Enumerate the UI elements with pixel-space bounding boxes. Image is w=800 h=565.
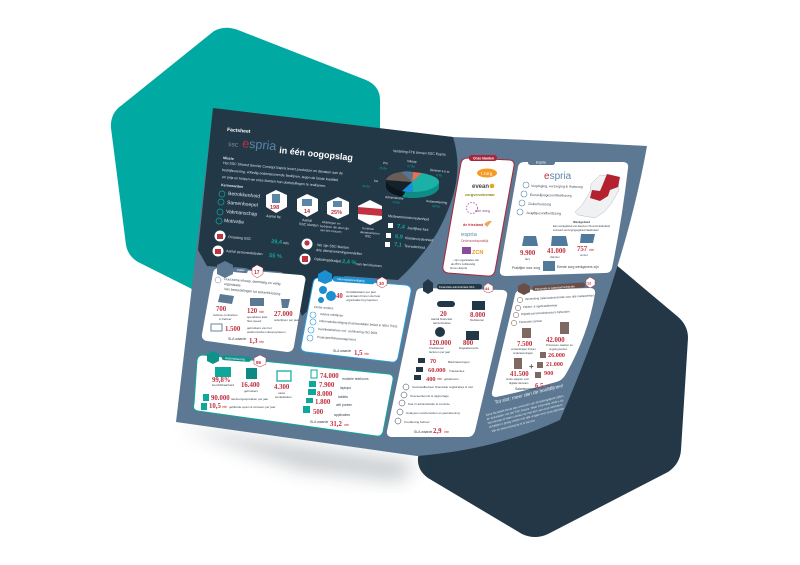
checklist: Overeenkomst & rapportage	[410, 394, 449, 398]
satisfaction scores: 7,1	[394, 242, 402, 249]
footnote: binnen Espria	[450, 266, 468, 270]
checklist: Projectportfoliomanagement	[317, 335, 356, 342]
stat: percentage: bedrijven die deel zijn	[320, 224, 349, 231]
stat: 9.900: 9.900	[520, 250, 536, 257]
stat: aantal fte: 198	[270, 205, 279, 211]
stat: personeel: 55 %	[269, 253, 282, 260]
stat: 41.000	[547, 236, 568, 259]
kernwaarden list: Betrokkenheid	[228, 191, 260, 200]
stat: 7.500: ondersteuningen	[513, 351, 534, 355]
stat: 120 mln	[247, 298, 268, 323]
stat: locaties	[302, 238, 362, 256]
panel: arbo partners: een zorg	[475, 209, 490, 213]
device list: tablets	[338, 395, 348, 399]
closing text: zij helpen u graag verder met alle vragen over onze diensten	[488, 406, 565, 429]
total: 1,5	[354, 350, 363, 357]
stat: 27.000: orderlijnen per jaar	[274, 318, 299, 322]
total: 31,2	[330, 421, 342, 428]
stat: 120 mln: mln	[259, 310, 264, 314]
checklist: Facturatie contact	[519, 319, 542, 324]
badge: 30	[379, 281, 385, 286]
intro text: Duurzame inkoop, doelmatig en veilig	[224, 277, 281, 286]
stat: 42.000: Processen, kaarten en	[546, 343, 573, 347]
badge: 44	[485, 287, 490, 291]
stat: 757 mln: mln	[589, 248, 594, 252]
closing text: en activiteiten van het SSC Espria. Meer informatie vindt u op	[486, 398, 564, 421]
stat: 41.500: Grote stappen voor	[506, 377, 529, 381]
device list: 8.000	[317, 391, 333, 398]
footnote	[450, 258, 479, 270]
icon: plus: +	[529, 362, 534, 371]
logo: zorgpartner: zorgverzekeraar	[465, 192, 495, 197]
dark background hexagon	[418, 253, 688, 537]
figures list: geldstroom	[444, 377, 459, 381]
total: SLA waarde	[228, 337, 246, 341]
kernwaarden list: Kernwaarden	[221, 183, 243, 189]
closing text: het intranet of neem contact op met een van onze adviseurs	[487, 402, 563, 425]
stat: 42.000	[546, 322, 573, 351]
pie labels: Administratie	[385, 195, 404, 201]
stat: 20: administraties	[433, 321, 451, 325]
satisfaction scores: Jaarlijkse fout	[407, 226, 429, 232]
pie chart: Verdeling FTE binnen SSC Espria	[393, 149, 446, 157]
map: netherlands	[575, 174, 620, 218]
badge: Automatisering	[225, 356, 246, 361]
badge: 17	[254, 270, 260, 276]
figures list: 60.000	[428, 367, 446, 374]
logo: e	[242, 136, 250, 151]
total: mln	[364, 352, 369, 356]
stat: locaties: 14	[304, 209, 311, 215]
logo: SSC	[228, 142, 239, 149]
checklist: Kas in administratie & controle	[408, 402, 450, 406]
icon: gears	[318, 286, 336, 303]
stat: 1.500: gebruikers van het	[247, 326, 272, 330]
stat: omzet	[214, 230, 289, 246]
stat: 800: Dagstatements	[459, 346, 479, 350]
closing text: Deze factsheet bevat een overzicht van de belangrijkste cijfers	[485, 394, 564, 417]
checklist: Kwaliteitsbeheer incl. certificering ISO 9001	[318, 327, 378, 335]
satisfaction scores: 6,9	[395, 234, 403, 241]
teal background hexagon	[111, 28, 380, 293]
checklist: Advies richtlijnen	[320, 312, 344, 318]
stat: locaties: SSC klanten	[299, 222, 319, 228]
checklist: Voorraadbeheer financiële registraties & mut	[412, 385, 473, 389]
pie labels: 17 fte	[407, 164, 415, 169]
badge: 86	[256, 360, 262, 365]
pie labels: 8 fte	[436, 173, 443, 178]
panel: arbo partners: t zorg	[481, 171, 493, 176]
checklist: Informatiebeveiliging (huishoudelijke beleid in NEN 7510)	[319, 319, 397, 328]
stat: 16.400	[241, 368, 260, 393]
stat: 4.300: werkplekken	[275, 395, 292, 399]
stat: 8.000: Debiteuren	[470, 318, 485, 322]
stat: percentage: Afdelingen en	[322, 220, 341, 226]
stat: 10,5 mln: mln	[222, 405, 227, 409]
stat: 40: Ontwikkelaars per jaar	[346, 290, 376, 294]
device list: 500	[313, 409, 324, 416]
stat: 7.500: 7.500	[517, 341, 533, 348]
stat: 4.300	[274, 371, 292, 399]
stat: 99,8%: beschikbaarheid	[212, 383, 234, 387]
stat: 1.500	[211, 324, 286, 334]
figures: 21.000	[546, 361, 563, 368]
checklist: Verpleging, verzorging & thuiszorg	[531, 184, 583, 189]
total	[228, 337, 264, 345]
satisfaction scores: Tevredenheid	[404, 244, 425, 250]
device list: mobiele telefoons	[342, 377, 369, 381]
note: Een werkgebied van Espria in Noord-Nederland	[553, 224, 610, 228]
pie labels: Pm	[383, 161, 388, 165]
badge	[518, 277, 595, 295]
stat hexagons	[266, 190, 382, 239]
badge: Financiële administratie SFA	[439, 285, 475, 289]
checklist: Pakket- & applicatiebeheer	[523, 303, 558, 309]
stat: 800: 800	[463, 340, 474, 347]
logo: een zorg	[466, 202, 478, 214]
checklist: Eerstelijnsgezondheidszorg	[530, 193, 572, 198]
footer line: Praktijke voor zorg	[512, 266, 540, 270]
stat: 27.000: 27.000	[274, 311, 293, 318]
panel: arbo partners: Onze klanten	[473, 156, 494, 160]
total	[310, 420, 349, 428]
stat: 41.000: 41.000	[547, 248, 566, 255]
closing text	[485, 383, 565, 433]
logo	[228, 135, 277, 153]
total: mln	[444, 430, 449, 434]
device list: 74.000	[320, 373, 339, 380]
stat: 20	[431, 301, 455, 325]
stat: 9.900	[520, 236, 538, 261]
stat: 90.000	[203, 394, 268, 402]
badge	[423, 279, 493, 294]
figures: 26.000	[548, 352, 565, 359]
panel: hr	[492, 277, 595, 397]
stat: 1.500: elektronische inkoopsysteem	[247, 330, 286, 334]
figures list: mln	[437, 377, 442, 381]
panel: financiele administratie	[387, 279, 507, 437]
footnote: ...zijn organisaties die	[452, 258, 479, 262]
pie chart	[362, 149, 450, 209]
checklist: Ziekenhuiszorg	[528, 202, 551, 206]
device list	[303, 370, 369, 417]
intro text: Van beoordelingen tot ziekenhuiszorg	[224, 287, 281, 296]
satisfaction scores: 7,4	[397, 224, 406, 231]
kernwaarden list: Samenhoepel	[227, 200, 258, 209]
checklist	[307, 305, 397, 342]
stat: 8.000: 8.000	[470, 312, 486, 319]
stat: 20: 20	[440, 311, 447, 318]
stat: 20: Aantal financiële	[431, 317, 453, 321]
kernwaarden list: Motivatie	[224, 218, 244, 226]
total: mln	[546, 384, 551, 388]
sheet contents	[176, 108, 647, 456]
stat: personeel	[212, 246, 282, 260]
factsheet label: Factsheet	[227, 127, 251, 135]
device list: 1.800	[315, 399, 331, 406]
device list: 7.900	[319, 382, 335, 389]
figures list: Bankrekeningen	[448, 360, 470, 364]
pie labels: 15 fte	[379, 166, 387, 171]
pie labels: Automatisering	[426, 199, 448, 205]
pie labels: FA	[374, 179, 379, 183]
total: SLA waarde	[414, 430, 432, 434]
mission text: bedrijfsvoering, volledig ondersteunende bedrijven, tegen de beste kwaliteit	[222, 168, 338, 182]
kernwaarden list	[216, 183, 260, 226]
closing text: kijk op www.sscespria.nl of bel ons	[491, 418, 536, 433]
panel: arbo partners: Onderzoekspraktijk	[461, 239, 489, 243]
dark header panel	[198, 108, 458, 316]
pie labels: 10 fte	[392, 200, 400, 205]
stat: 120.000: facturen per jaar	[429, 350, 450, 354]
stat: locaties	[297, 194, 319, 228]
checklist	[511, 293, 595, 326]
stat: 90.000: 90.000	[211, 395, 230, 402]
omzet stats	[212, 230, 382, 268]
stat: 7.500: verwerkingen binnen	[511, 347, 536, 351]
total: Salariswaarde	[515, 387, 537, 391]
badge: 12	[587, 282, 591, 286]
checklist	[395, 384, 473, 424]
pie labels: Inkoop	[407, 159, 417, 164]
device list: applicaties	[334, 413, 350, 417]
stat: 42.000: ongoing kosten	[549, 347, 568, 351]
badge	[217, 261, 263, 278]
stat: locaties: We zijn SSC-klanten	[317, 243, 349, 250]
pie labels: 44 fte	[362, 184, 370, 189]
stat: certificate: dienstverlenen	[360, 230, 380, 236]
stat: aantal fte: Aantal fte	[266, 214, 281, 219]
stat: 16.400: gebruikers	[244, 389, 259, 393]
stat: 40: 40	[336, 293, 343, 300]
stat: 27.000	[274, 299, 299, 322]
pie labels: 88 fte	[432, 204, 440, 209]
stat: 90.000: telefoongesprekken per jaar	[231, 397, 268, 401]
badge	[207, 351, 266, 367]
logo: evean: evean	[472, 184, 489, 190]
closing text: Tot slot: meer dan de hoofdlijnen!	[494, 383, 565, 406]
total	[333, 349, 369, 357]
note: Werkgebied	[573, 220, 590, 224]
panel: espria: Espria	[536, 160, 546, 164]
figures list: Transacties	[449, 369, 465, 373]
mission text: en prijs en helpen we onze klanten hun doelstellingen te realiseren.	[222, 175, 326, 188]
stat: 10,5 mln: gefilterde spam & virussen per jaar	[229, 405, 275, 409]
stat: 757 mln	[577, 234, 595, 257]
stat: 1.500: 1.500	[225, 326, 241, 333]
intro text	[215, 277, 281, 296]
total: 2,9	[433, 428, 442, 435]
stat: 10,5 mln: 10,5	[209, 403, 221, 410]
device list: laptops	[340, 386, 351, 390]
stat: 120.000: Crediteuren	[429, 346, 444, 350]
panel: espria	[500, 159, 628, 276]
panel: pallas	[202, 261, 306, 352]
stat: certificate: Continue	[362, 226, 375, 231]
intro text: organisatie	[224, 282, 241, 287]
satisfaction scores: Klanttevredenheid	[405, 236, 433, 242]
badge: Personele & salarisadministratie	[535, 284, 575, 291]
stat: personeel: Aantal personeelsleden	[226, 249, 263, 256]
heading: in één oogopslag	[279, 145, 353, 163]
checklist	[517, 182, 583, 216]
stat: aantal fte	[266, 190, 287, 219]
mission text	[222, 156, 343, 188]
stat: 10,5 mln	[201, 403, 275, 410]
stat: 41.500: digitale diensten	[509, 381, 529, 385]
panel: arbo partners	[443, 155, 514, 276]
checklist: Jeugdgezondheidszorg	[526, 211, 561, 216]
stat: 120 mln: flow speed	[247, 319, 262, 323]
total: 1,3	[249, 338, 258, 345]
note: inclusief verzorgingsgebied daarbuiten	[553, 228, 599, 232]
total	[414, 428, 449, 435]
stat: 41.500: 41.500	[510, 371, 529, 378]
footer line: Eerste zorg werkgevers zijn	[557, 265, 599, 269]
figures	[535, 352, 565, 378]
stat: percentage	[320, 197, 349, 234]
logo: de friesland: de friesland	[463, 223, 483, 227]
total: mln	[344, 423, 349, 427]
badge: Pallas	[237, 268, 245, 272]
stat: 99,8%	[212, 367, 234, 387]
total: mln	[259, 340, 264, 344]
total: SLA waarde	[310, 420, 328, 424]
stat: 40	[336, 290, 381, 302]
stat: 16.400: 16.400	[241, 382, 260, 389]
figures list	[414, 358, 470, 383]
logo: espria: espria	[461, 232, 478, 238]
sheet	[176, 108, 647, 456]
checklist: Onder andere:	[314, 305, 334, 310]
badge	[318, 270, 387, 288]
stat: percentage: 25%	[331, 210, 342, 216]
figures: 900	[544, 370, 553, 377]
stat: budget: van het inkomen	[356, 262, 382, 268]
figures list: 400	[426, 376, 436, 383]
total	[515, 383, 551, 391]
satisfaction scores	[385, 214, 433, 250]
total: SLA waarde	[333, 349, 351, 353]
stat: 42.000: 42.000	[546, 337, 565, 344]
stat: 4.300: vaste	[278, 391, 286, 395]
total: 6,5	[535, 383, 544, 390]
stat: 7.500	[511, 328, 536, 355]
stat: locaties: drie dienstverleningsmodellen	[316, 248, 362, 256]
stat: 4.300: 4.300	[274, 384, 290, 391]
title block	[227, 127, 353, 163]
stat: 40: organisatie bij projecten	[346, 298, 378, 302]
stat: 120.000	[429, 327, 452, 354]
stat: certificate: SSC	[365, 234, 372, 239]
stat: omzet: 28,4	[271, 239, 283, 246]
stat: 9.900: fte's	[525, 257, 531, 261]
stat: 41.000: cliënten	[550, 255, 560, 259]
stat: omzet: Omzeting SSC	[228, 235, 252, 241]
stat: budget	[300, 254, 382, 268]
stat: omzet: mln	[283, 241, 289, 245]
panel: informatiebeveiliging	[301, 270, 411, 362]
stat: 700: Actieve contracten	[213, 313, 238, 317]
mission text: Missie	[223, 156, 234, 161]
stat: 120.000: 120.000	[429, 340, 452, 347]
stat: 40: werkzaam binnen de hele	[346, 294, 381, 298]
footer line	[512, 261, 599, 271]
pie labels: Diverse s.e.w.	[430, 168, 450, 174]
checklist: Verwerking salarisadministratie voor alle medewerkers	[525, 293, 595, 301]
stat: 99,8%: 99,8%	[212, 377, 231, 384]
pie labels	[362, 159, 450, 209]
note	[553, 220, 610, 232]
stat: certificate	[358, 200, 382, 239]
kernwaarden list: Vakmanschap	[226, 209, 258, 218]
satisfaction scores: Medewerkerstevredenheid	[388, 214, 429, 222]
logo: spria	[249, 137, 277, 153]
stat: 757 mln: 757	[577, 246, 588, 253]
device list: wifi punten	[336, 403, 352, 407]
checklist: Digitale personeelsdossiers bijhouden	[521, 309, 570, 316]
footnote: als BV's zelfstandig	[451, 262, 476, 266]
stat: 120 mln: 120	[247, 308, 258, 315]
stat: 800	[459, 331, 479, 350]
mission text: Het SSC Shared Service Concept Espria levert producten en diensten aan de	[223, 161, 343, 175]
logo: espria: espria	[544, 171, 572, 182]
stat: 700: 700	[216, 306, 227, 313]
stat: locaties: Aantal	[302, 218, 312, 223]
logo: t-zorg	[477, 168, 497, 178]
figures list: 70	[430, 359, 436, 365]
stat: 8.000	[470, 301, 486, 322]
sheet shadow	[180, 428, 417, 482]
panel: automatisering	[194, 351, 393, 436]
stat: percentage: van het concern	[320, 228, 342, 234]
stat: 120 mln: spenditure kast	[247, 315, 268, 319]
stat: budget: 2,4 %	[342, 259, 357, 266]
stat: 700	[213, 294, 238, 321]
logo: zcn	[462, 247, 471, 254]
panel: arbo partners: ZCN	[472, 250, 483, 256]
stat: budget: Opleidingsbudget	[314, 257, 341, 263]
stat: 757 mln: omzet	[580, 253, 588, 257]
stat: 41.500	[506, 358, 529, 385]
badge: Informatiebeveiliging	[337, 277, 365, 283]
stat: 700: in beheer	[219, 317, 232, 321]
checklist: Creditering beheer	[404, 420, 430, 424]
checklist: Analyses voorbereiden en jaarrekening	[406, 411, 460, 415]
